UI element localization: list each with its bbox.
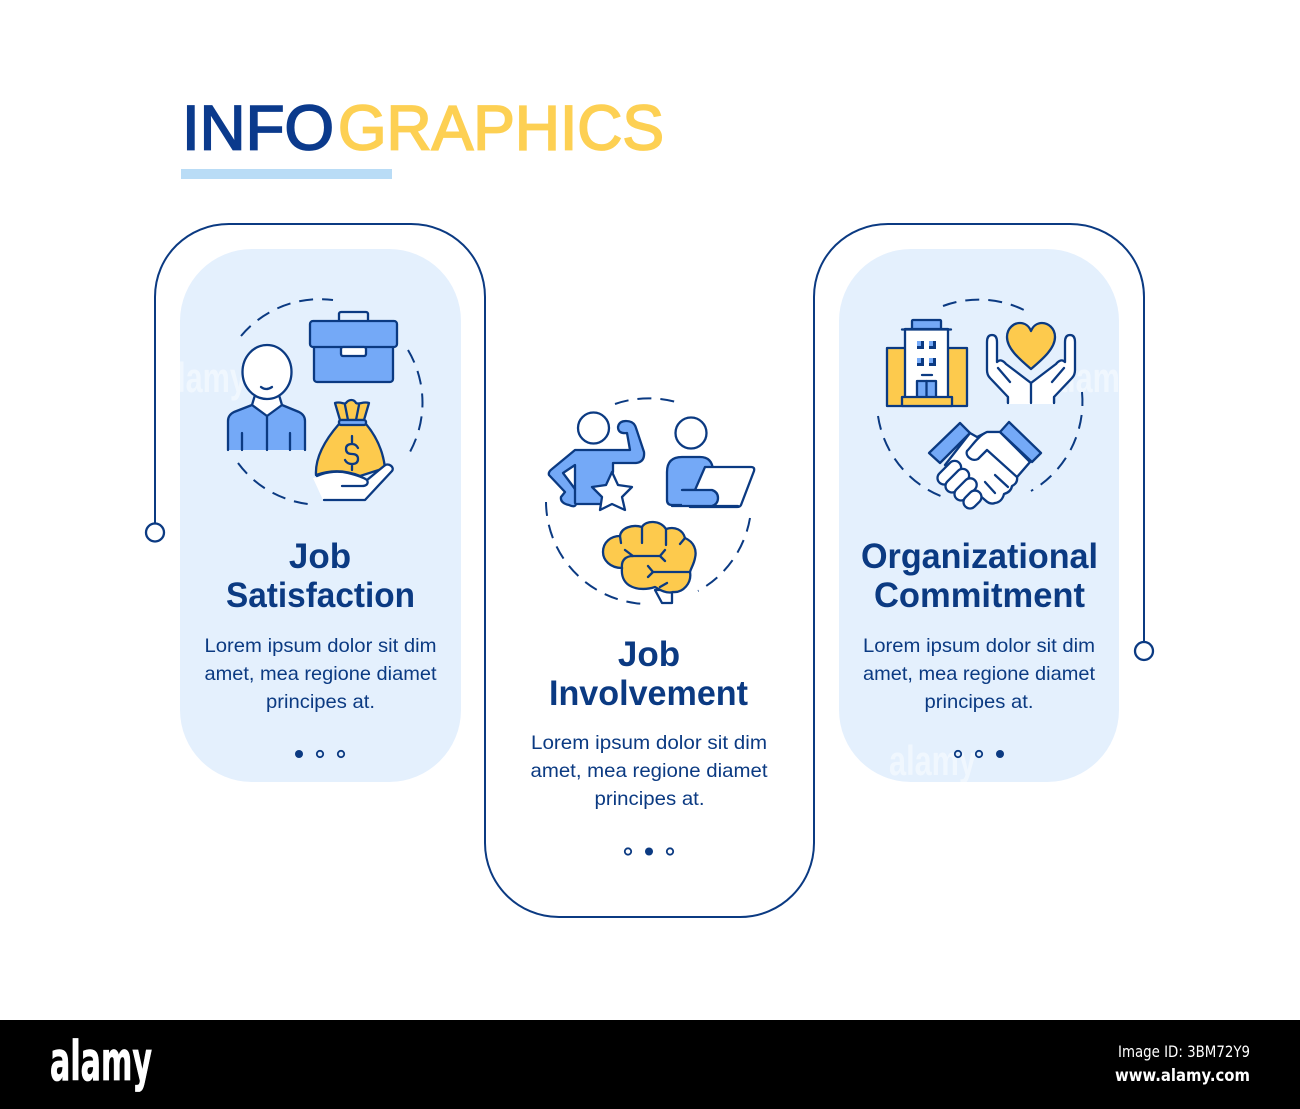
icon: person at laptop <box>667 418 754 507</box>
text block: organizational commitment: Lorem ipsum dolor sit dim <box>863 635 1095 657</box>
watermarks: alamy <box>889 737 976 784</box>
text block: organizational commitment <box>863 635 1096 713</box>
heading: organizational commitment: Commitment <box>874 576 1085 615</box>
heading: job involvement <box>549 635 748 713</box>
text block: job satisfaction <box>204 635 437 713</box>
heading: organizational commitment <box>861 537 1098 615</box>
title underline <box>181 169 392 179</box>
title: GRAPHICS <box>338 94 664 164</box>
heading: job satisfaction: Job <box>289 537 351 576</box>
text block: organizational commitment: principes at. <box>924 691 1034 713</box>
panel: job satisfaction background <box>180 249 461 782</box>
icon: flexing person with star <box>549 412 644 510</box>
text block: job involvement: amet, mea regione diamet <box>530 760 768 782</box>
watermarks: alamy <box>160 354 247 401</box>
icon: heart in hands <box>987 323 1075 404</box>
text block: job involvement: Lorem ipsum dolor sit dim <box>531 732 767 754</box>
dashed ring <box>238 299 422 504</box>
heading: organizational commitment: Organizational <box>861 537 1098 576</box>
footer image id: Image ID: 3BM72Y9 <box>1118 1042 1250 1061</box>
heading: job involvement: Involvement <box>549 674 748 713</box>
title <box>182 94 664 164</box>
heading: job satisfaction: Satisfaction <box>226 576 415 615</box>
heading: job involvement: Job <box>618 635 680 674</box>
text block: job satisfaction: Lorem ipsum dolor sit dim <box>204 635 436 657</box>
dashed ring <box>546 398 750 604</box>
text block: job involvement <box>530 732 768 810</box>
text block: job satisfaction: amet, mea regione diamet <box>204 663 437 685</box>
panel: organizational commitment background <box>839 249 1119 782</box>
footer logo: alamy <box>50 1030 152 1093</box>
title: INFO <box>182 94 334 164</box>
icon: money bag on hand <box>313 400 393 500</box>
icon: person <box>228 345 305 450</box>
icon group: organizational commitment <box>861 300 1098 758</box>
icon: brain <box>603 522 696 603</box>
icon: handshake <box>929 422 1041 511</box>
icon: office building <box>887 320 967 406</box>
text block: job satisfaction: principes at. <box>266 691 375 713</box>
connecting outline <box>146 224 1153 917</box>
watermarks: alamy <box>1050 354 1137 401</box>
pagination dots 2 <box>625 848 673 856</box>
footer url: www.alamy.com <box>1115 1066 1250 1086</box>
watermarks <box>160 354 1137 784</box>
icon group: job involvement <box>530 398 768 856</box>
heading: job satisfaction <box>226 537 415 615</box>
footer bar <box>0 1020 1300 1109</box>
pagination dots 3 <box>955 750 1004 758</box>
text block: job involvement: principes at. <box>594 788 704 810</box>
icon group: job satisfaction <box>204 299 437 758</box>
icon: briefcase <box>310 312 397 382</box>
dashed ring <box>878 300 1082 497</box>
text block: organizational commitment: amet, mea regione diamet <box>863 663 1096 685</box>
pagination dots 1 <box>295 750 344 758</box>
